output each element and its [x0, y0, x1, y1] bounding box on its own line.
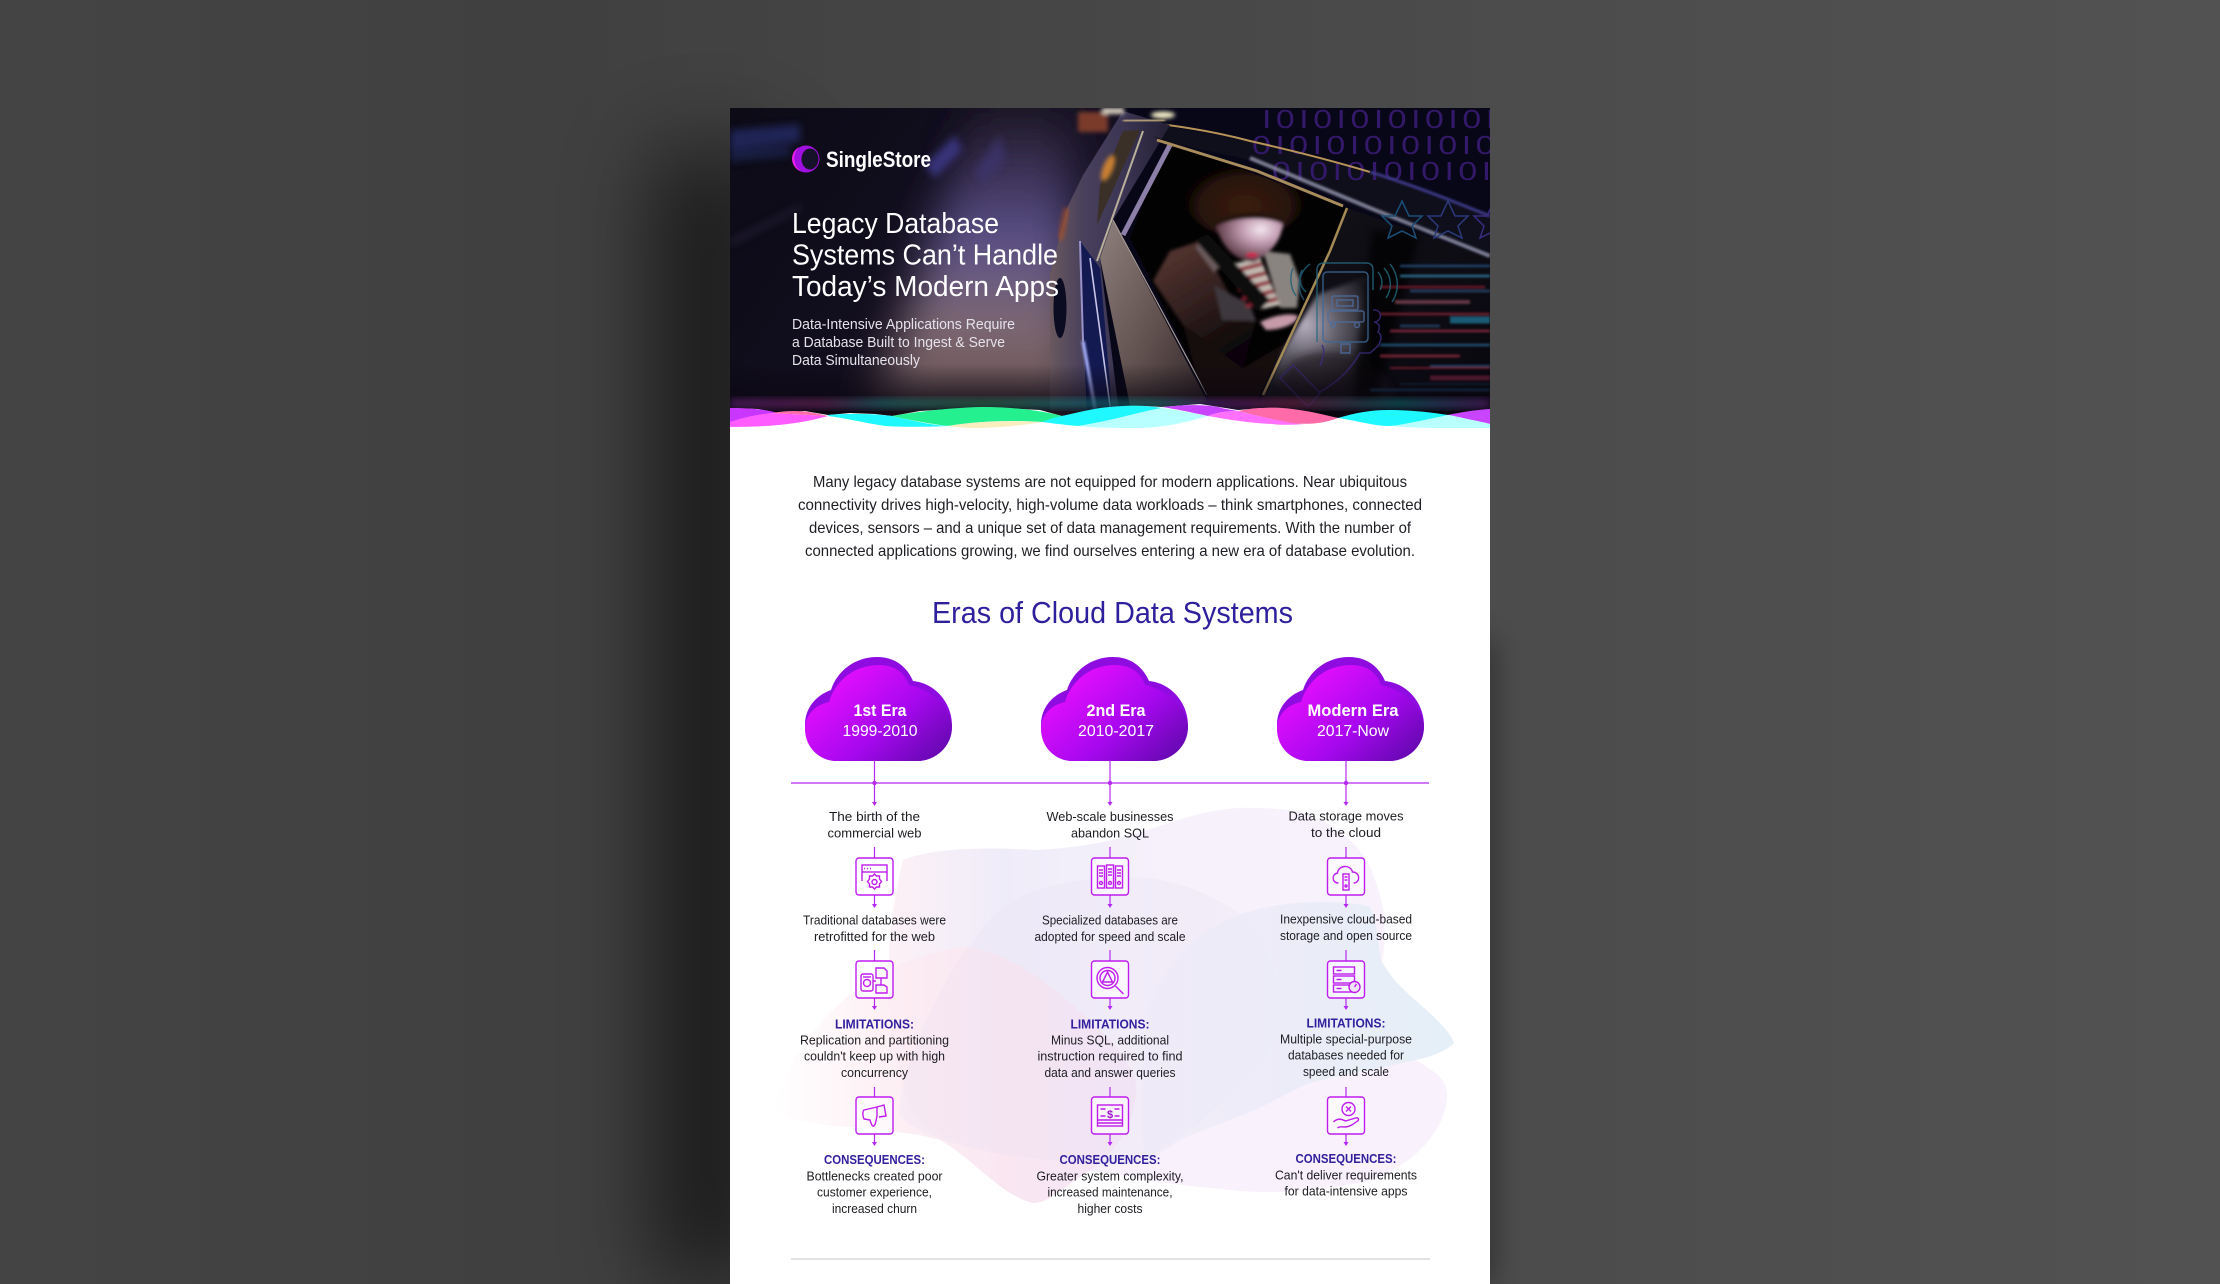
heading: eras: Eras of Cloud Data Systems: [932, 595, 1293, 630]
intro paragraph: connected applications growing, we find ourselves entering a new era of database evolution.: [805, 543, 1415, 560]
column 3 text: storage and open source: [1280, 928, 1412, 943]
cloud: modern era: Modern Era: [1308, 701, 1399, 720]
icon: thumbs down: [856, 1097, 893, 1134]
column 2 text: data and answer queries: [1044, 1065, 1176, 1080]
cloud: 2nd era: 2010-2017: [1078, 723, 1154, 740]
icon: magnifier warning: [1092, 961, 1128, 998]
stars: [1382, 201, 1514, 238]
subtitle: Data Simultaneously: [792, 353, 921, 369]
column 1 text: Replication and partitioning: [800, 1032, 949, 1048]
intro paragraph: Many legacy database systems are not equipped for modern applications. Near ubiquitous: [813, 474, 1407, 491]
intro paragraph: connectivity drives high-velocity, high-volume data workloads – think smartphones, connected: [798, 497, 1422, 514]
roof band: [1123, 118, 1490, 258]
icon: hand with x: [1328, 1097, 1364, 1134]
background blobs: [775, 808, 1454, 1203]
column 2 text: Specialized databases are: [1042, 912, 1178, 928]
door panel: [1100, 220, 1207, 420]
column 1 text: CONSEQUENCES:: [824, 1152, 925, 1167]
title: Legacy Database: [792, 208, 999, 240]
column 3 text: Multiple special-purpose: [1280, 1032, 1412, 1046]
cloud: 1st era: [805, 657, 952, 761]
logo: [792, 146, 931, 172]
window interior: [1130, 136, 1347, 401]
subtitle: [792, 317, 1015, 369]
divider: [791, 1258, 1430, 1260]
bright door reflection: [1271, 278, 1367, 388]
car pillar: [1050, 111, 1170, 420]
cloud: 2nd era: 2nd Era: [1086, 701, 1146, 720]
column 1 text: The birth of the: [829, 809, 920, 824]
logo: SingleStore: [826, 147, 931, 172]
woman: [1153, 158, 1305, 410]
column 3 text: CONSEQUENCES:: [1296, 1151, 1396, 1166]
column 1 text: Traditional databases were: [803, 912, 946, 928]
data streaks: [1370, 266, 1490, 390]
title: Today’s Modern Apps: [792, 271, 1059, 303]
icon: logo ring: [792, 146, 820, 172]
road lights: [1078, 108, 1175, 132]
column 2 text: adopted for speed and scale: [1034, 929, 1186, 944]
cloud: modern era: 2017-Now: [1317, 723, 1389, 740]
column 1 text: couldn't keep up with high: [804, 1048, 945, 1064]
icon: replication disk: [856, 961, 893, 998]
window frame gold: [1157, 140, 1343, 206]
wave band: [730, 404, 1490, 430]
timeline: [791, 761, 1429, 1146]
panel: hero photo: [730, 106, 1533, 430]
column 2 text: increased maintenance,: [1048, 1184, 1172, 1200]
column 1 text: retrofitted for the web: [814, 929, 935, 944]
column 1 text: Bottlenecks created poor: [806, 1168, 943, 1184]
binary pattern: I0I0I0I0I0I0I0: [1262, 106, 1523, 134]
icon: server gauge: [1328, 961, 1364, 998]
phone hologram: [1280, 263, 1397, 407]
title: Systems Can’t Handle: [792, 240, 1058, 272]
quarter window: [1097, 130, 1140, 225]
column 3 text: for data-intensive apps: [1284, 1184, 1408, 1198]
connectors: column 2: [1108, 761, 1112, 1146]
column 2 text: LIMITATIONS:: [1070, 1016, 1150, 1032]
column 1 text: [800, 809, 949, 1216]
column 2 text: instruction required to find: [1038, 1048, 1182, 1064]
column 3 text: LIMITATIONS:: [1306, 1016, 1386, 1030]
binary pattern: 0I0I0I0I0I0I0I: [1272, 158, 1533, 186]
binary pattern: 0I0I0I0I0I0I0I: [1252, 132, 1513, 160]
icon: web gear: [856, 858, 893, 895]
icon: cost document: [1092, 1097, 1128, 1134]
intro paragraph: [798, 474, 1422, 560]
icon: cost document: $: [1107, 1109, 1113, 1121]
right dark car body: [1100, 108, 1490, 400]
column 2 text: Web-scale businesses: [1046, 809, 1174, 824]
subtitle: Data-Intensive Applications Require: [792, 317, 1015, 333]
column 1 text: customer experience,: [817, 1184, 932, 1200]
column 1 text: concurrency: [841, 1065, 908, 1080]
connectors: column 1: [872, 761, 877, 1146]
column 3 text: to the cloud: [1311, 825, 1381, 840]
subtitle: a Database Built to Ingest & Serve: [792, 335, 1005, 351]
cloud: 2nd era: [1041, 657, 1188, 761]
panel: infographic page: [730, 106, 1533, 1284]
icon: cloud server: [1328, 858, 1364, 895]
column 2 text: [1034, 809, 1186, 1216]
intro paragraph: devices, sensors – and a unique set of data management requirements. With the number of: [809, 520, 1412, 537]
cloud: 1st era: 1999-2010: [842, 723, 918, 740]
column 2 text: abandon SQL: [1071, 826, 1149, 840]
wave glow: [730, 399, 1490, 408]
column 2 text: Greater system complexity,: [1036, 1168, 1184, 1184]
column 3 text: Data storage moves: [1288, 808, 1404, 824]
column 1 text: commercial web: [828, 826, 922, 840]
icon: server racks: [1092, 858, 1128, 895]
bottom fade: [730, 366, 1490, 416]
column 2 text: CONSEQUENCES:: [1060, 1152, 1160, 1167]
title: [792, 208, 1059, 303]
column 3 text: speed and scale: [1303, 1064, 1389, 1079]
binary pattern: [1253, 110, 1490, 180]
column 2 text: higher costs: [1078, 1201, 1143, 1216]
cloud: modern era: [1277, 657, 1424, 761]
cloud: 1st era: 1st Era: [854, 701, 907, 720]
column 1 text: LIMITATIONS:: [835, 1016, 914, 1032]
column 3 text: Inexpensive cloud-based: [1280, 912, 1412, 926]
column 3 text: [1275, 808, 1417, 1198]
column 3 text: databases needed for: [1288, 1048, 1405, 1062]
column 2 text: Minus SQL, additional: [1051, 1032, 1169, 1048]
column 3 text: Can't deliver requirements: [1275, 1168, 1417, 1182]
column 1 text: increased churn: [832, 1201, 917, 1216]
connectors: column 3: [1344, 761, 1348, 1146]
